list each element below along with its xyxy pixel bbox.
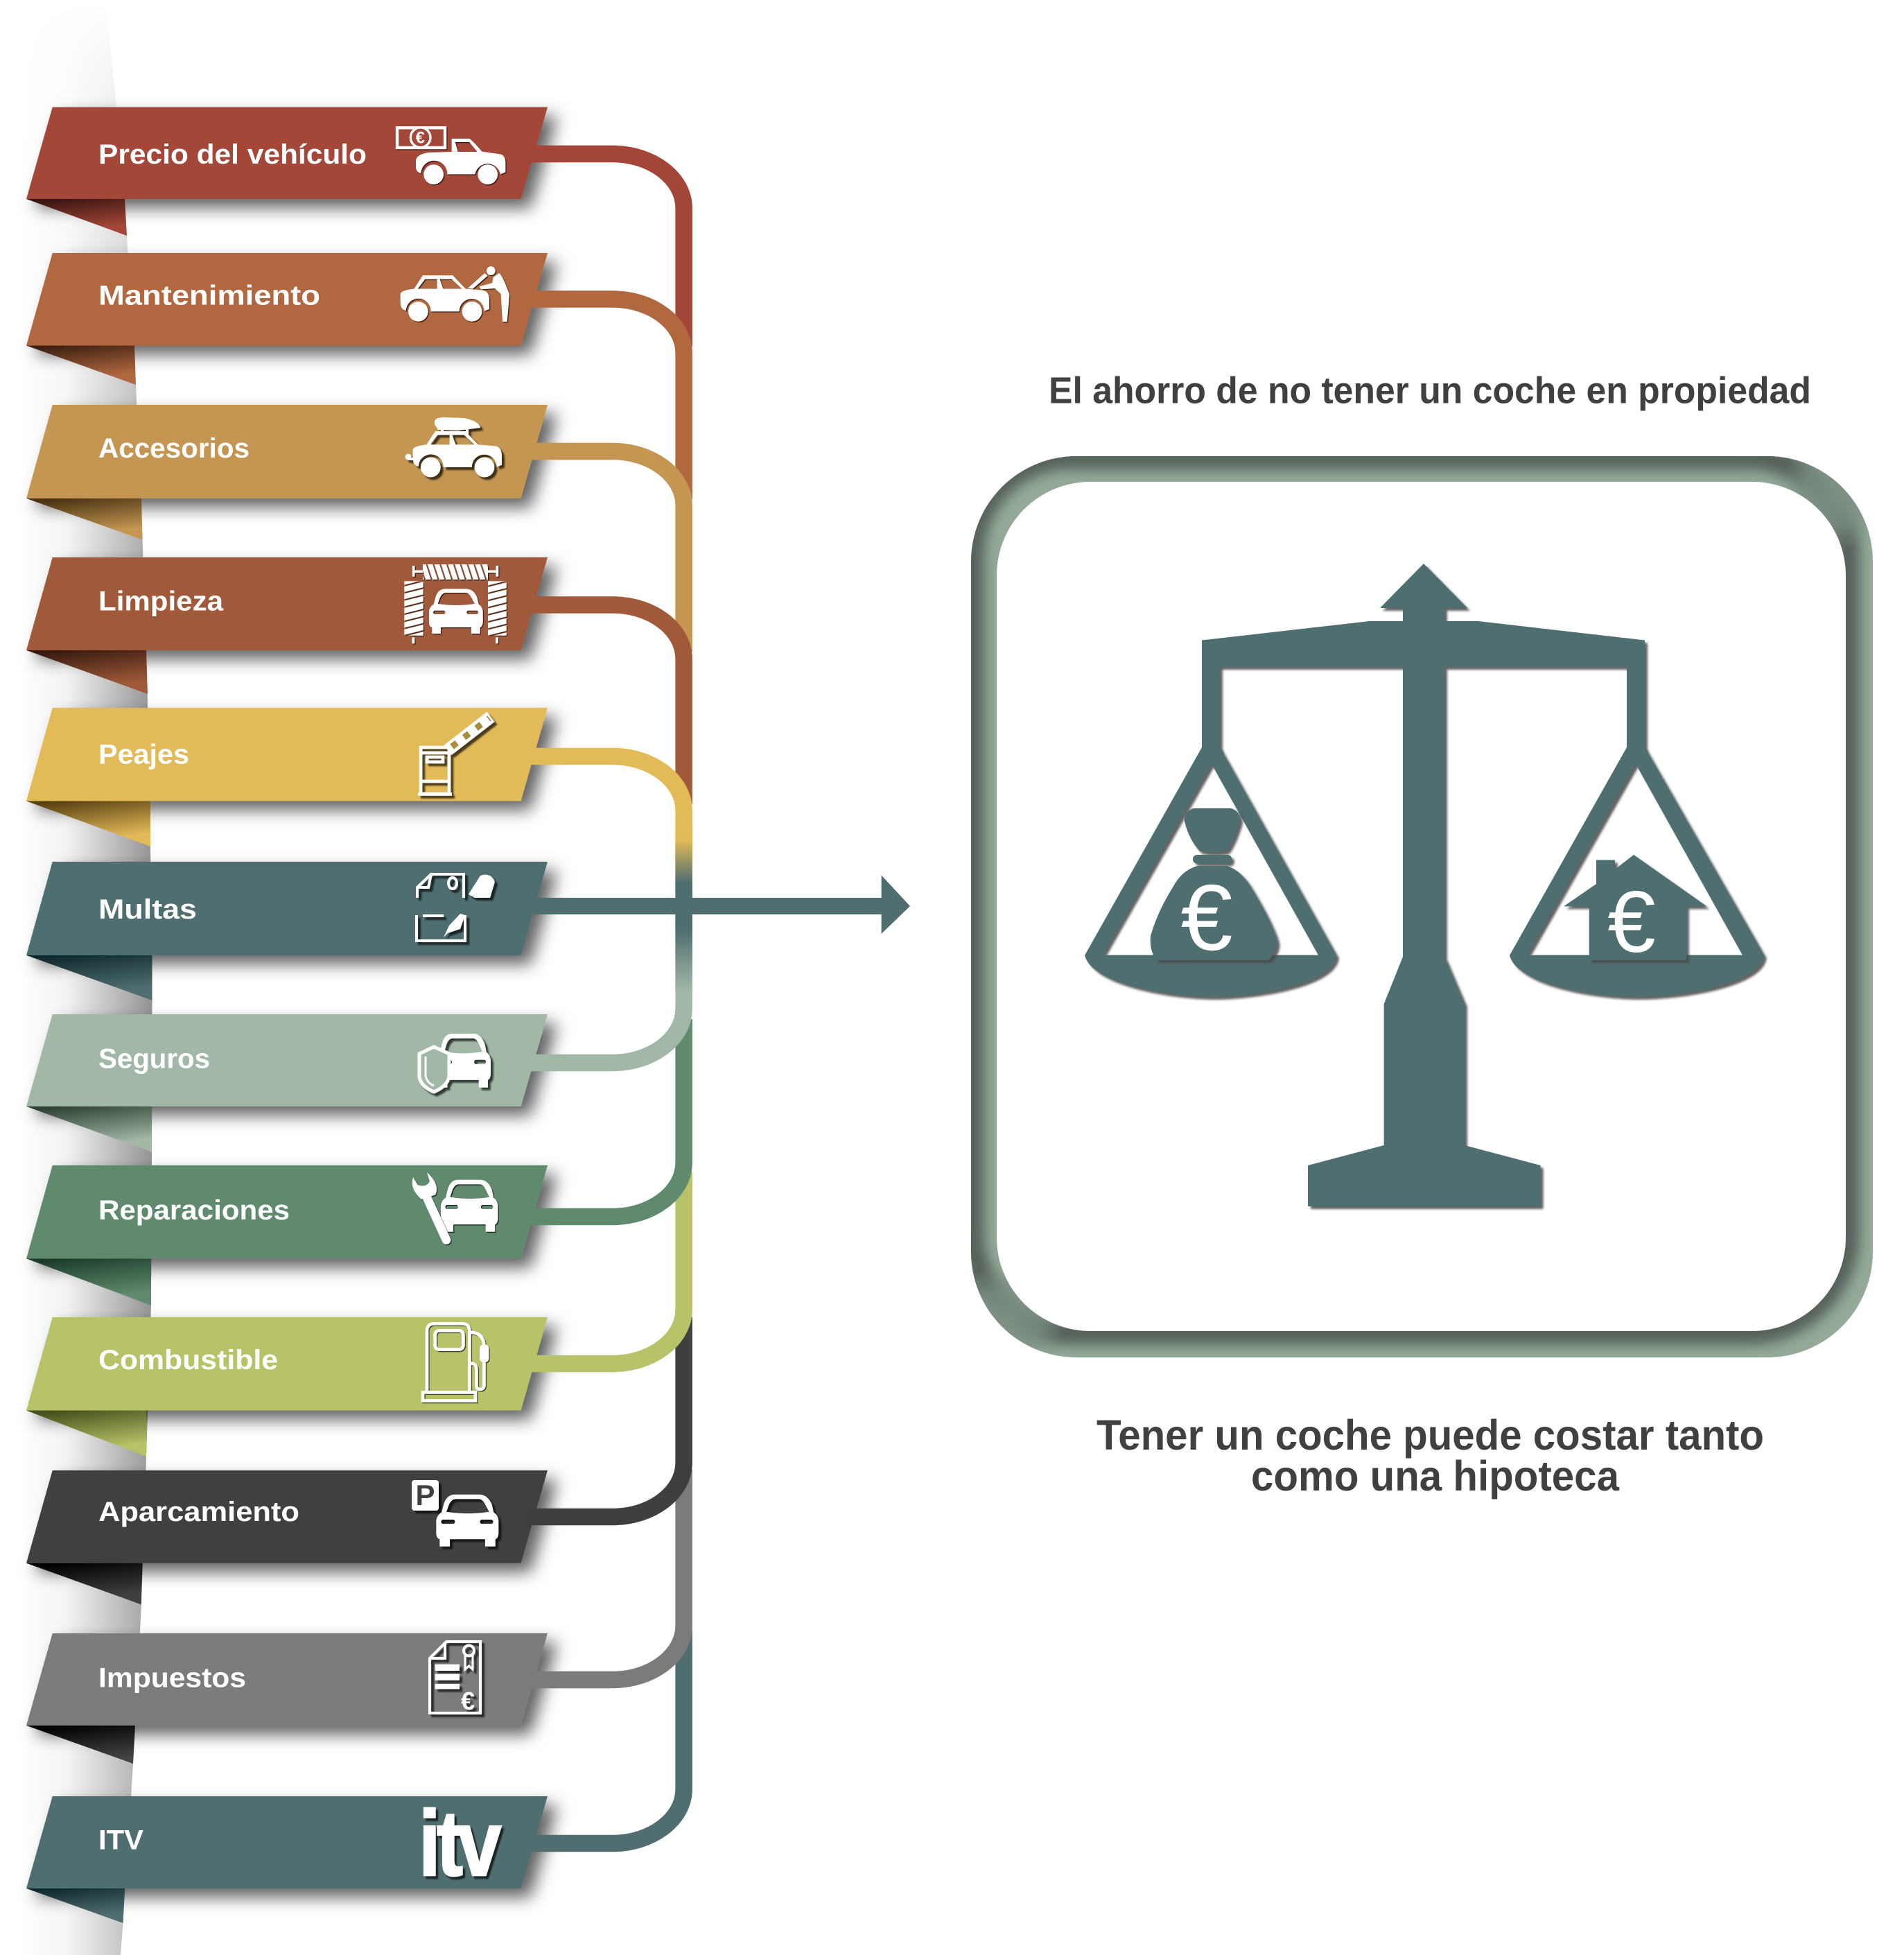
connector: Accesorios xyxy=(527,451,684,652)
icon: mechanic and car xyxy=(401,266,509,322)
ribbon xyxy=(26,1633,548,1726)
banner: Seguros xyxy=(26,1014,548,1152)
banner: Reparaciones xyxy=(26,1165,548,1305)
icon: wrench and car xyxy=(412,1172,498,1240)
banner: ITV xyxy=(26,1791,548,1923)
ribbon fold xyxy=(26,1259,151,1305)
arrow: Multas to savings panel xyxy=(527,875,910,934)
ribbon xyxy=(26,1165,548,1259)
icon: money bag xyxy=(1151,808,1277,970)
caption: como una hipoteca xyxy=(1251,1452,1620,1500)
ribbon fold xyxy=(26,199,127,236)
connector: Impuestos xyxy=(527,1470,684,1680)
ribbon xyxy=(26,557,548,650)
panel frame xyxy=(947,433,1896,1381)
banner: Peajes xyxy=(26,708,548,846)
icon: fine ticket and pen xyxy=(417,874,495,941)
label: Aparcamiento xyxy=(98,1497,299,1527)
ribbon fold xyxy=(26,345,136,385)
label: Impuestos xyxy=(98,1662,246,1693)
scale beam and post xyxy=(1202,564,1645,1206)
icon: tax document xyxy=(430,1642,480,1715)
caption: Tener un coche puede costar tanto xyxy=(1097,1411,1764,1459)
banner: Limpieza xyxy=(26,557,548,694)
banner: Impuestos xyxy=(26,1633,548,1764)
banner: Aparcamiento xyxy=(26,1470,548,1604)
connector: Combustible xyxy=(527,1172,684,1364)
ribbon xyxy=(26,862,548,955)
icon: house xyxy=(1564,855,1706,971)
label: Combustible xyxy=(98,1345,278,1375)
connector: Seguros xyxy=(527,984,684,1063)
ribbon fold xyxy=(26,1106,152,1152)
ribbon fold xyxy=(26,1888,125,1923)
label: Accesorios xyxy=(98,433,250,464)
label: Limpieza xyxy=(98,586,224,617)
ribbon xyxy=(26,1014,548,1106)
banner: Mantenimiento xyxy=(26,253,548,385)
icon: banknote and car xyxy=(397,128,505,184)
ribbon xyxy=(26,1317,548,1410)
icon: parking sign and car: P xyxy=(415,1479,435,1511)
icon: shield and car xyxy=(419,1034,491,1092)
label: Seguros xyxy=(98,1044,210,1075)
connector: Limpieza xyxy=(527,605,684,804)
icon: itv logo: itv xyxy=(419,1791,501,1895)
banner: Combustible xyxy=(26,1317,548,1457)
connector: ITV xyxy=(527,1629,684,1843)
label: Precio del vehículo xyxy=(98,139,367,170)
connector: colour transition on trunk xyxy=(675,828,692,991)
banner: Multas xyxy=(26,862,548,1000)
icon: car with roof box xyxy=(405,417,502,477)
ribbon xyxy=(26,253,548,345)
ribbon xyxy=(26,107,548,199)
ribbon fold xyxy=(26,955,152,1000)
label: Multas xyxy=(98,894,197,925)
label: Reparaciones xyxy=(98,1195,290,1226)
ribbon fold xyxy=(26,1726,135,1764)
ribbon xyxy=(26,1470,548,1563)
icon: tax document: € xyxy=(461,1687,475,1715)
left pan xyxy=(1085,747,1336,997)
connector: Mantenimiento xyxy=(527,299,684,499)
icon: car wash xyxy=(404,564,507,643)
ribbon fold xyxy=(26,1410,146,1457)
heading: savings: El ahorro de no tener un coche en propiedad xyxy=(1049,370,1811,412)
ribbon xyxy=(26,405,548,498)
icon: fuel pump xyxy=(423,1323,489,1401)
connector: Peajes xyxy=(527,756,684,860)
banner: Precio del vehículo xyxy=(26,107,548,236)
connector: Reparaciones xyxy=(527,1019,684,1217)
right pan xyxy=(1510,747,1764,997)
ribbon xyxy=(26,1796,548,1888)
icon: banknote and car: € xyxy=(416,129,425,148)
ribbon fold xyxy=(26,1563,143,1604)
icon: money bag: € xyxy=(1180,865,1233,970)
icon: balance scale xyxy=(1085,564,1764,1206)
label: Mantenimiento xyxy=(98,280,320,311)
caption xyxy=(1097,1411,1764,1500)
ribbon fold xyxy=(26,801,150,846)
ribbon fold xyxy=(26,650,148,694)
banner: Accesorios xyxy=(26,405,548,540)
ribbon fold xyxy=(26,498,143,540)
ribbon xyxy=(26,708,548,801)
icon: toll barrier xyxy=(418,717,491,794)
connector: Precio del vehículo xyxy=(527,154,684,347)
label: ITV xyxy=(98,1825,143,1855)
label: Peajes xyxy=(98,739,189,770)
icon: house: € xyxy=(1607,874,1656,971)
icon: parking sign and car xyxy=(412,1479,498,1547)
paper shadow strip xyxy=(0,0,166,1955)
connector: Aparcamiento xyxy=(527,1317,684,1517)
